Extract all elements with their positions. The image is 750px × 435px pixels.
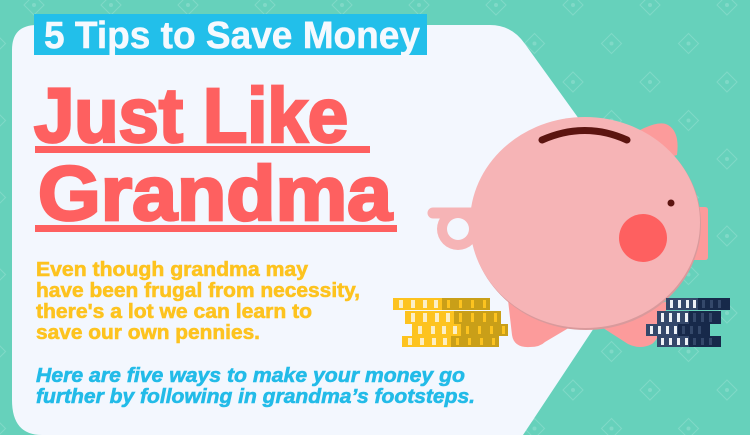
secondary paragraph: further by following in grandma’s footsteps. xyxy=(36,385,475,408)
title xyxy=(34,73,397,237)
pig body xyxy=(470,117,700,328)
intro paragraph: Even though grandma may xyxy=(36,258,309,281)
icon: navy coin stack xyxy=(646,298,730,347)
pig cheek xyxy=(619,214,667,262)
intro paragraph: there's a lot we can learn to xyxy=(36,300,312,323)
subtitle banner: 5 Tips to Save Money xyxy=(44,15,420,57)
pig legs xyxy=(508,300,670,347)
secondary paragraph: Here are five ways to make your money go xyxy=(36,364,465,387)
secondary paragraph xyxy=(36,364,475,408)
icon: piggy bank xyxy=(433,117,708,347)
title: Just Like xyxy=(34,73,348,159)
icon: gold coin stack xyxy=(393,298,508,347)
pig body shadow xyxy=(471,118,701,330)
pig snout xyxy=(690,207,708,260)
pig tail xyxy=(433,208,480,250)
pig coin slot xyxy=(542,130,627,140)
intro paragraph: have been frugal from necessity, xyxy=(36,279,360,302)
pig ear xyxy=(640,123,678,160)
pig eye xyxy=(668,200,674,206)
title: Grandma xyxy=(38,151,393,237)
intro paragraph xyxy=(36,258,360,344)
intro paragraph: save our own pennies. xyxy=(36,321,260,344)
